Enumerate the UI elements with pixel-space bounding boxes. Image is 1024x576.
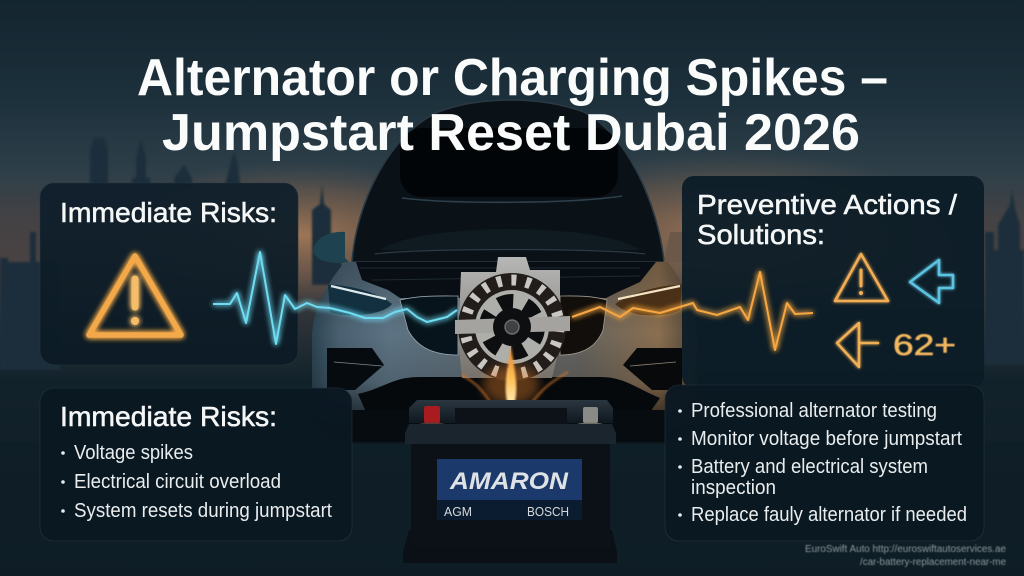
solutions list: Monitor voltage before jumpstart [691,428,962,450]
city skyline [0,138,1024,370]
risks list: Voltage spikes [74,442,193,464]
source footer [805,544,1006,568]
alternator rotor [458,273,566,381]
title: Jumpstart Reset Dubai 2026 [162,104,860,162]
icon: warning triangle [89,256,181,335]
heading: preventive actions: Solutions: [697,219,825,250]
icon: orange arrow [837,323,878,367]
car body [312,262,697,440]
battery lid [405,424,616,444]
solutions list: Replace fauly alternator if needed [691,504,967,526]
blue voltage spike line [213,252,457,344]
battery [403,400,617,563]
alternator hub [493,308,531,346]
brand: amaron: AMARON [449,468,569,495]
panel: immediate risks list [40,388,352,541]
panel: solutions list [665,385,984,541]
source footer: EuroSwift Auto http://euroswiftautoservices.ae [805,544,1006,555]
panel: preventive actions [682,176,984,388]
ground [0,442,1024,576]
source footer: /car-battery-replacement-near-me [860,557,1006,568]
car [312,100,697,444]
heading: preventive actions: Preventive Actions / [697,189,957,220]
fog lights [327,348,682,390]
risks list: Electrical circuit overload [74,471,281,493]
heading: immediate risks: Immediate Risks: [60,197,277,228]
icon: warning triangle small [835,254,888,301]
solutions list: inspection [691,477,776,499]
solutions list: Battery and electrical system [691,456,928,478]
headlights [328,285,682,315]
lower intake [352,377,666,444]
number: 62+: 62+ [893,329,956,362]
sparks [462,345,568,407]
heading: immediate risks list: Immediate Risks: [60,401,277,432]
car hood [352,100,664,262]
car mirrors [313,232,688,263]
battery top [409,400,613,423]
orange voltage spike line [572,272,813,350]
solutions list: Professional alternator testing [691,400,937,422]
battery case [411,444,610,548]
solutions list [678,400,967,526]
alternator housing [458,257,560,378]
terminal: positive [418,406,446,428]
alternator [455,257,570,381]
terminal: negative [576,407,604,428]
label: blue [437,459,582,520]
risks list [61,442,332,522]
label: agm: AGM [444,505,472,519]
title: Alternator or Charging Spikes – [137,49,888,107]
grille [400,296,607,355]
icon: blue arrow [910,260,953,303]
panel: immediate risks icon [40,183,298,365]
battery base [403,530,617,563]
alternator bracket [455,316,570,334]
label: bosch: BOSCH [527,505,569,519]
title [137,49,888,162]
risks list: System resets during jumpstart [74,500,332,522]
